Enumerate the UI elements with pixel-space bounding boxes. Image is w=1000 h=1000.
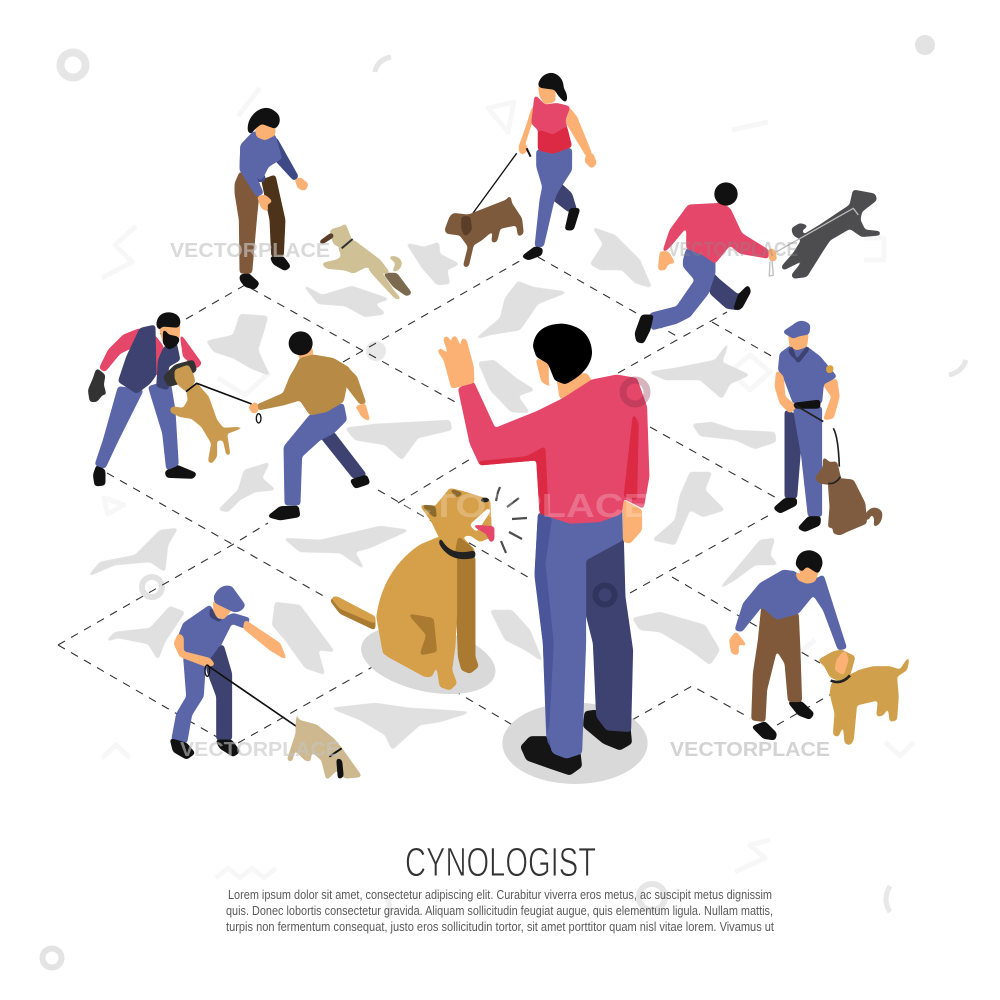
beige dog [287,700,362,780]
figure: man in brown shirt holding leash [248,331,370,520]
brown sitting dog [815,457,882,535]
brown dog [445,195,523,267]
grey dog silhouettes on the floor [87,227,778,750]
semi-transparent marks over the main figure [596,380,647,604]
figure: police officer pointing, with sniffing dog on leash [170,586,362,780]
figure: police officer with sitting dog [773,321,882,535]
watermarks: VECTORPLACE [170,240,330,262]
central sitting dog barking [330,488,502,705]
figure: running man with grey dog [635,182,880,343]
watermarks: VECTORPLACE [350,487,650,524]
title: CYNOLOGIST [405,839,596,885]
watermarks: VECTORPLACE [670,739,830,761]
body text: Lorem ipsum dolor sit amet, consectetur adipiscing elit. Curabitur viverra eros metus, ac suscipit metus dignissim [228,888,772,902]
body text: turpis non fermentum consequat, justo eros sollicitudin tortor, sit amet porttitor quam nisl vitae lorem. Vivamus ut [226,920,774,934]
bark lines around the dog's mouth [496,487,527,553]
body text: quis. Donec lobortis consectetur gravida. Aliquam sollicitudin feugiat augue, quis elementum ligula. Nullam mattis, [226,904,773,918]
grey dog [777,190,880,278]
figure: bearded man in vest training dog on bite sleeve [88,313,252,486]
dashed isometric floor grid [58,257,835,743]
tan dog with stick [319,223,412,300]
watermarks [170,239,830,761]
leaping dog on leash [170,365,252,463]
figure: man in blue sweater petting dog [729,551,910,745]
tan dog being petted [818,650,910,745]
figure: woman with blue sweater and stick-carrying dog [235,108,412,300]
figure: woman in red top walking a brown dog [445,73,597,267]
body text [226,888,774,934]
watermarks: VECTORPLACE [180,739,340,761]
watermarks: VECTORPLACE [668,239,798,261]
main figure: cynologist seen from behind with raised hand [438,324,649,784]
